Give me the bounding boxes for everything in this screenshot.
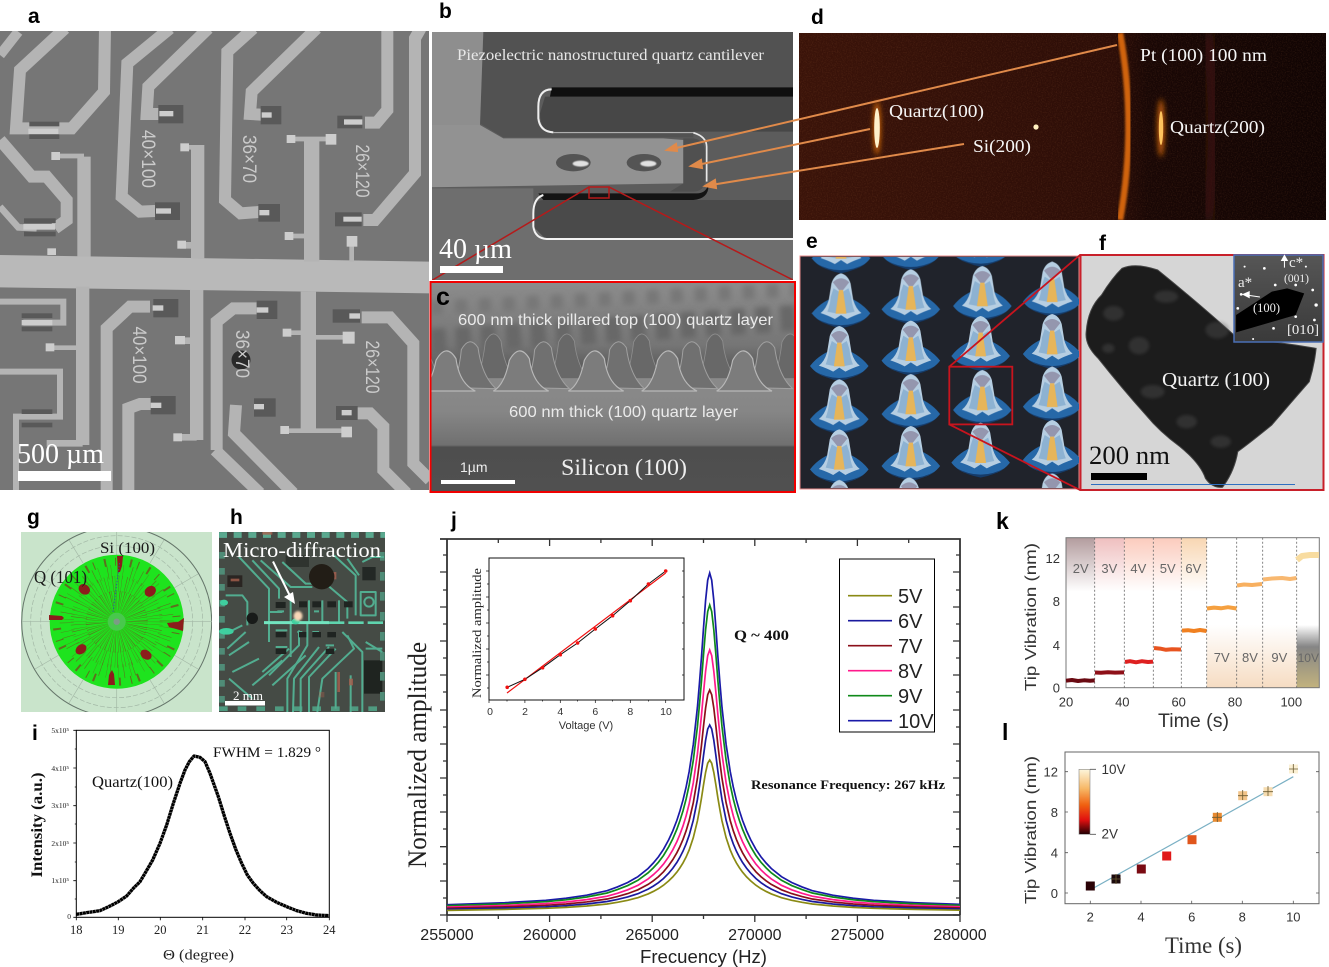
inset tick labels: 10 [660, 706, 672, 718]
zoom connector lines [949, 255, 1080, 490]
y tick labels: 8 [1053, 594, 1060, 609]
center circle [108, 613, 126, 631]
y axis title: Normalized amplitude [403, 642, 432, 868]
label d: d [811, 6, 824, 29]
x tick labels: 280000 [933, 927, 987, 944]
y tick labels: 4x10⁵ [51, 764, 69, 773]
bond pads [22, 105, 362, 441]
panel i: rocking curve chart [29, 726, 336, 964]
SAED inset [1234, 254, 1323, 342]
y tick labels: 12 [1046, 551, 1060, 566]
voltage color bands [1066, 538, 1319, 688]
device size labels: 36×70 [231, 330, 252, 378]
y tick labels: 3x10⁵ [51, 801, 69, 810]
periphery pads [219, 526, 386, 544]
panel k: tip vibration vs time [1023, 538, 1319, 732]
inset labels: [010] [1287, 323, 1319, 338]
inset tick labels: 2 [522, 706, 528, 718]
scale bar 2 mm [225, 688, 265, 706]
label i: i [32, 722, 38, 745]
panel g: pole figure [21, 527, 212, 717]
d labels [889, 45, 1267, 157]
quartz label: Quartz (100) [1162, 369, 1270, 391]
quartz annotation: Quartz(100) [92, 774, 173, 791]
particle defect [232, 350, 250, 370]
x tick labels: 40 [1115, 694, 1130, 710]
y tick labels: 1x10⁵ [51, 876, 69, 885]
quartz 100 spot [874, 101, 880, 155]
label g: g [27, 506, 40, 529]
y tick labels: 4 [1053, 638, 1060, 653]
layered background [431, 282, 795, 491]
scale bar 1 um [441, 459, 515, 484]
reciprocal axes [1246, 260, 1284, 297]
inset labels: c* [1289, 255, 1303, 271]
quartz grain [1086, 266, 1316, 487]
polar grid [22, 527, 212, 717]
Pt ring [1120, 33, 1128, 220]
x tick labels: 265000 [626, 927, 679, 944]
inset labels: (100) [1253, 301, 1280, 315]
inset y title: Normalized amplitude [470, 567, 484, 698]
data markers [1086, 764, 1298, 890]
substrate background [0, 31, 429, 490]
x tick labels: 18 [70, 923, 83, 937]
Si 200 spot [1033, 124, 1039, 130]
x tick labels: 260000 [523, 927, 576, 944]
voltage step dividers [1095, 538, 1297, 688]
quartz layer label: 600 nm thick (100) quartz layer [509, 404, 739, 421]
panel b: cantilever SEM [430, 32, 795, 281]
inset x title: Voltage (V) [559, 720, 613, 732]
lower voltage labels: 9V [1271, 650, 1288, 665]
pale background [21, 532, 212, 712]
data curve [76, 756, 329, 916]
legend: 7V [898, 636, 923, 658]
substrate regions [480, 32, 793, 137]
step data traces [1066, 555, 1319, 681]
lower voltage labels: 8V [1242, 650, 1258, 665]
lower voltage labels: 10V [1298, 651, 1319, 665]
scale bar 200 nm: 200 nm [1089, 441, 1170, 470]
y axis title: Tip Vibration (nm) [1023, 543, 1040, 691]
x tick labels: 24 [323, 923, 336, 937]
inset tick labels [487, 706, 672, 718]
inset tick labels: 8 [627, 706, 633, 718]
colorbar legend: 2V [1102, 826, 1118, 842]
inset labels: a* [1238, 275, 1252, 291]
x axis title: Θ (degree) [163, 948, 234, 964]
faint side ring [1207, 33, 1214, 220]
upper voltage labels: 4V [1130, 561, 1147, 576]
panel a: device micrograph [0, 28, 430, 493]
inset linear fit [507, 573, 666, 693]
legend: 9V [898, 686, 923, 708]
y tick labels [51, 726, 71, 921]
x tick labels: 270000 [728, 927, 782, 944]
scale bar 500 um: 500 µm [17, 438, 104, 470]
device size labels: 40×100 [128, 326, 149, 384]
x axis title: Time (s) [1158, 711, 1229, 732]
upper voltage labels: 2V [1073, 561, 1089, 576]
legend [840, 559, 934, 733]
selection box [949, 367, 1012, 424]
x tick labels: 22 [239, 923, 251, 937]
x axis title: Time (s) [1165, 933, 1242, 958]
diffraction dots [1236, 266, 1318, 340]
fit line [1090, 777, 1293, 890]
resonance annotation: Resonance Frequency: 267 kHz [751, 778, 946, 792]
device size labels: 26×120 [351, 144, 372, 198]
x tick labels: 100 [1280, 694, 1302, 710]
cantilever holes [556, 154, 591, 171]
y tick labels [1046, 551, 1060, 696]
inset tick labels: 4 [557, 706, 563, 718]
blue baseline [1091, 484, 1295, 486]
label c: c [436, 283, 450, 311]
orange callout arrows [667, 45, 1117, 188]
bright bus line [264, 618, 329, 627]
bright rim [538, 89, 553, 132]
x tick labels: 8 [1239, 910, 1246, 924]
label k: k [996, 508, 1009, 534]
x tick labels: 255000 [420, 927, 474, 944]
axes frame and ticks [440, 539, 960, 922]
TEM background [1080, 255, 1324, 490]
label l: l [1002, 719, 1008, 745]
axes box and ticks [1065, 752, 1319, 904]
x tick labels: 60 [1171, 694, 1186, 710]
panel h: micro-diffraction photo [219, 532, 386, 712]
scale bar 40 um: 40 µm [439, 233, 512, 265]
y tick labels: 12 [1044, 764, 1058, 780]
d labels: Pt (100) 100 nm [1140, 45, 1267, 66]
x tick labels: 20 [154, 923, 167, 937]
laser spot [294, 611, 302, 621]
x tick labels: 19 [112, 923, 125, 937]
scale bar 40 um [440, 239, 512, 273]
y tick labels: 0 [1051, 886, 1058, 901]
y tick labels: 8 [1051, 805, 1058, 820]
zoom selection lines [431, 187, 795, 281]
y tick labels: 0 [67, 912, 71, 921]
panel d: diffraction pattern [799, 33, 1326, 220]
detector noise [799, 33, 1326, 220]
inset labels: (001) [1284, 273, 1309, 285]
metal traces [0, 28, 430, 493]
upper voltage labels: 3V [1101, 561, 1118, 576]
x tick labels: 6 [1188, 910, 1195, 924]
radial streaks [57, 562, 177, 682]
x tick labels [420, 927, 987, 944]
device size labels: 36×70 [238, 135, 259, 183]
SEM background [432, 32, 793, 206]
x tick labels [70, 923, 336, 937]
silicon label: Silicon (100) [561, 455, 687, 480]
legend: 8V [898, 661, 923, 683]
receding pillar rows [431, 318, 795, 342]
device size labels: 40×100 [137, 130, 158, 188]
x axis title: Frecuency (Hz) [640, 946, 767, 967]
x tick labels [1059, 694, 1302, 710]
y tick labels: 0 [1053, 680, 1060, 696]
panel border [430, 282, 795, 492]
x tick labels: 275000 [831, 927, 884, 944]
dark contact pads [276, 601, 353, 654]
scale bar 2 mm: 2 mm [233, 688, 263, 703]
x tick labels: 80 [1228, 694, 1242, 710]
dark wells [227, 555, 382, 694]
lower voltage labels [1214, 650, 1319, 665]
x tick labels: 21 [196, 923, 209, 937]
panel j: resonance chart [403, 539, 987, 967]
pillared layer label: 600 nm thick pillared top (100) quartz layer [458, 312, 774, 329]
axes box [1066, 538, 1319, 688]
label h: h [230, 506, 243, 529]
y tick labels: 2x10⁵ [51, 839, 69, 848]
lower voltage labels: 7V [1214, 650, 1230, 665]
inset data [507, 571, 666, 687]
y axis title: Intensity (a.u.) [29, 773, 46, 877]
axes frame [76, 730, 329, 917]
reflections [49, 556, 184, 685]
ticks [73, 730, 329, 920]
quartz pillars [432, 334, 794, 392]
label f: f [1099, 232, 1107, 255]
d labels: Quartz(100) [889, 101, 984, 122]
x tick labels [1087, 910, 1301, 924]
resonance curves [447, 573, 960, 910]
x tick labels: 23 [280, 923, 293, 937]
quartz 200 spot [1158, 99, 1164, 157]
scale bar 500 um [18, 444, 111, 481]
d labels: Quartz(200) [1170, 117, 1265, 138]
main bus [0, 255, 430, 293]
reddish specks [231, 532, 353, 697]
upper voltage labels [1073, 561, 1202, 576]
trench shadows [550, 87, 793, 97]
bright blotches [219, 600, 300, 635]
label a: a [28, 5, 40, 28]
y tick labels [1044, 764, 1058, 901]
y tick labels: 5x10⁵ [51, 726, 69, 735]
cantilever title: Piezoelectric nanostructured quartz cantilever [457, 47, 765, 64]
legend: 6V [898, 611, 923, 633]
inset tick labels: 0 [487, 706, 493, 718]
x tick labels: 20 [1059, 694, 1073, 710]
scale bar 1 um: 1µm [460, 459, 488, 475]
dark background [800, 256, 1079, 489]
legend: 5V [898, 586, 923, 608]
x tick labels: 10 [1286, 910, 1301, 924]
device size labels [128, 130, 382, 394]
x tick labels: 2 [1087, 910, 1094, 924]
pillar grid [810, 257, 1079, 488]
legend: 10V [898, 711, 934, 733]
dark sites [247, 564, 334, 624]
dark diffraction background [799, 33, 1326, 220]
inset tick labels: 6 [592, 706, 598, 718]
panel c: pillar cross section [430, 281, 796, 493]
colorbar legend: 10V [1102, 762, 1126, 777]
chip traces [226, 555, 384, 712]
dotted line [113, 563, 120, 612]
inset chart [470, 558, 684, 732]
panel e: nanopillar array [800, 256, 1080, 490]
Q label: Q (101) [34, 567, 87, 588]
panel l: tip vibration fit [1023, 752, 1319, 958]
d labels: Si(200) [973, 136, 1031, 157]
device size labels: 26×120 [361, 340, 382, 394]
green disc [50, 555, 184, 689]
y tick labels: 4 [1051, 846, 1058, 860]
micro-diffraction label: Micro-diffraction [223, 538, 381, 562]
inset labels [1238, 255, 1319, 338]
Si label: Si (100) [100, 540, 155, 557]
dark chip background [219, 532, 385, 712]
label e: e [806, 230, 818, 253]
label j: j [450, 509, 457, 532]
colorbar legend [1079, 762, 1126, 842]
y axis title: Tip Vibration (nm) [1023, 756, 1040, 904]
upper voltage labels: 6V [1185, 561, 1202, 576]
Q annotation: Q ~ 400 [734, 628, 789, 644]
upper voltage labels: 5V [1160, 561, 1176, 576]
FWHM annotation: FWHM = 1.829 ° [213, 745, 321, 761]
x tick labels: 4 [1137, 910, 1145, 924]
panel f: TEM [949, 254, 1324, 490]
arrow [273, 562, 295, 604]
label b: b [439, 0, 452, 23]
beam stop [1236, 288, 1304, 332]
